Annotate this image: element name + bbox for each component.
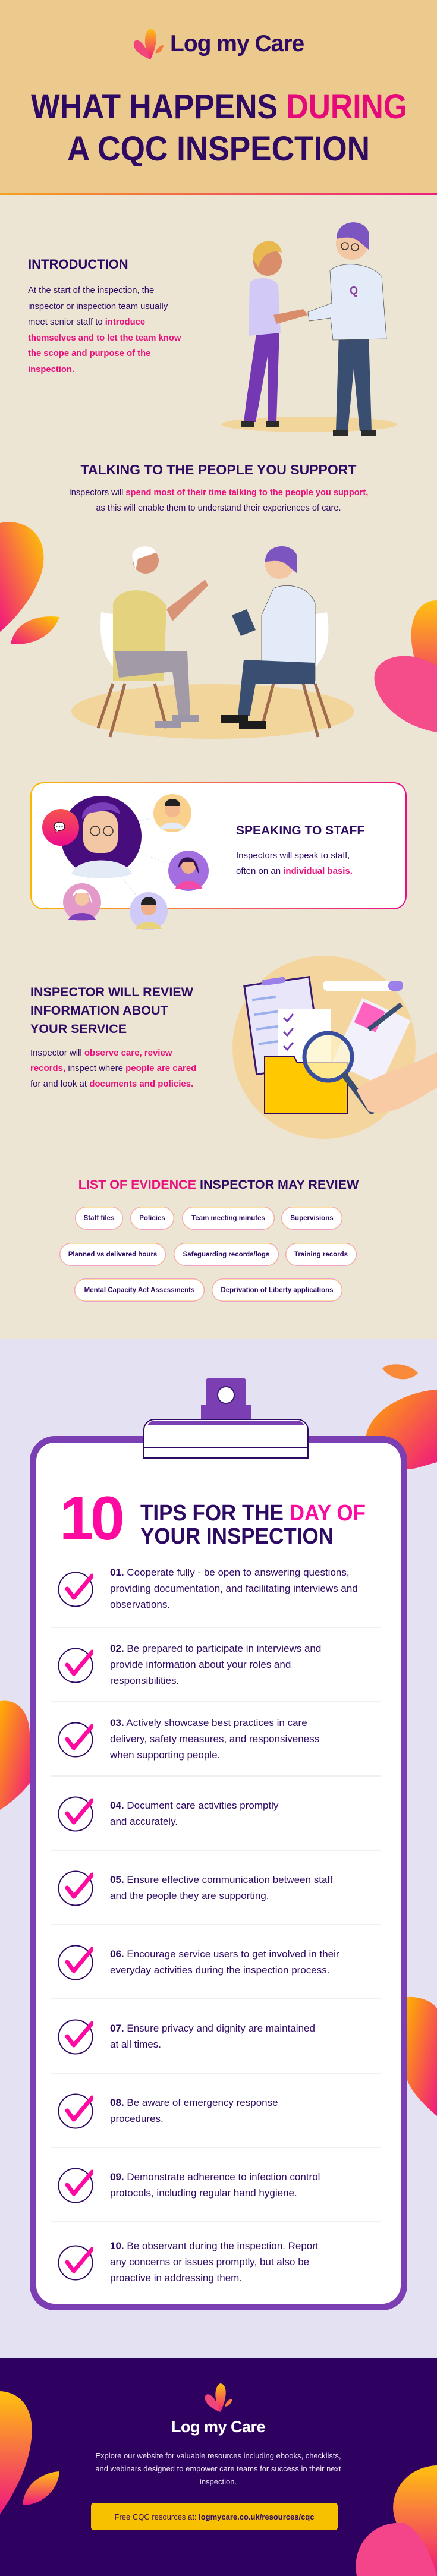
- logo header: [133, 29, 304, 59]
- speaking body text: Inspectors will speak to staff,: [236, 851, 350, 861]
- pill: deprivation of liberty: Deprivation of Liberty applications: [221, 1286, 334, 1293]
- illustration: staff avatars: 💬: [54, 821, 65, 833]
- pill: mental capacity: Mental Capacity Act Assessments: [84, 1286, 194, 1293]
- pill: planned vs delivered hours: [59, 1243, 166, 1266]
- heading: inspector review: [30, 985, 193, 1036]
- pill: team meeting minutes: [182, 1207, 275, 1230]
- panel: tips clipboard: [30, 1436, 407, 2310]
- icon: logo petals: [133, 29, 164, 59]
- footer logo: [171, 2383, 265, 2436]
- decorative blob left: [0, 522, 59, 644]
- tip 09: [58, 2168, 320, 2203]
- decorative blobs footer: [0, 2391, 437, 2576]
- icon: clipboard clip: [143, 1378, 309, 1459]
- tip 08: [58, 2093, 278, 2129]
- tips title: TIPS FOR THE DAY OF: [140, 1501, 366, 1526]
- tip 07: at all times.: [110, 2039, 161, 2049]
- tips section background: [0, 1339, 437, 2358]
- footer body text: Explore our website for valuable resources including ebooks, checklists, and webinars designed to empower care teams for success in their next inspection.: [95, 2451, 341, 2486]
- icon: footer logo: [205, 2383, 232, 2412]
- pill: deprivation of liberty: [212, 1278, 342, 1302]
- pill: training records: [285, 1243, 357, 1266]
- pill: staff files: Staff files: [84, 1215, 114, 1222]
- tip 01: 01. Cooperate fully - be open to answering questions, providing documentation, and facilitating interviews and observations.: [110, 1567, 358, 1610]
- tip 08: procedures.: [110, 2112, 164, 2124]
- tip 02: responsibilities.: [110, 1675, 179, 1686]
- tip 04: and accurately.: [110, 1815, 178, 1827]
- tip 06: [58, 1945, 339, 1980]
- pill: safeguarding: [174, 1243, 279, 1266]
- tip 08: 08. Be aware of emergency response: [110, 2097, 278, 2108]
- pill: team meeting minutes: Team meeting minutes: [191, 1215, 265, 1222]
- tip 05: [58, 1871, 333, 1906]
- illustration: handshake: [221, 222, 397, 436]
- logo text: Log my Care: [170, 31, 304, 56]
- tip 07: 07. Ensure privacy and dignity are maintained: [110, 2022, 315, 2034]
- tips title: [140, 1501, 366, 1549]
- pill: policies: Policies: [139, 1215, 165, 1222]
- tip 10: 10. Be observant during the inspection. Report: [110, 2240, 319, 2251]
- evidence pills: [59, 1207, 357, 1302]
- tip 02: provide information about your roles and: [110, 1659, 291, 1670]
- tip 03: 03. Actively showcase best practices in care: [110, 1717, 307, 1728]
- footer button: Free CQC resources at:: [114, 2512, 196, 2521]
- tip 06: 06. Encourage service users to get involved in their: [110, 1948, 339, 1959]
- tip 10: proactive in addressing them.: [110, 2272, 242, 2284]
- heading: list of evidence: LIST OF EVIDENCE INSPECTOR MAY REVIEW: [78, 1177, 359, 1192]
- review body: Inspector will observe care, review records, inspect where people are cared for and look at documents and policies.: [30, 1048, 196, 1089]
- footer background: [0, 2358, 437, 2576]
- big number 10: 10: [59, 1484, 121, 1553]
- tip 03: [58, 1717, 319, 1761]
- illustration: conversation seated: [71, 546, 354, 739]
- talking body text: [69, 488, 368, 513]
- illustration: staff avatars: [42, 794, 209, 930]
- heading: talking to the people you support: TALKING TO THE PEOPLE YOU SUPPORT: [81, 462, 356, 477]
- tip 03: delivery, safety measures, and responsiveness: [110, 1733, 319, 1744]
- heading: inspector review: INFORMATION ABOUT: [30, 1003, 168, 1018]
- title: WHAT HAPPENS DURING: [31, 87, 407, 126]
- pill: safeguarding: Safeguarding records/logs: [183, 1251, 269, 1258]
- heading: 10 tips: [59, 1484, 366, 1553]
- tip 04: [58, 1796, 278, 1832]
- pill: policies: [130, 1207, 174, 1230]
- heading: introduction: INTRODUCTION: [28, 257, 128, 272]
- pill: staff files: [75, 1207, 123, 1230]
- heading: speaking to staff: SPEAKING TO STAFF: [236, 824, 364, 837]
- tip 05: and the people they are supporting.: [110, 1890, 269, 1901]
- pill: training records: Training records: [294, 1251, 348, 1258]
- panel: inspector review text: [30, 985, 196, 1089]
- pill: supervisions: Supervisions: [290, 1215, 334, 1222]
- tip 10: any concerns or issues promptly, but also be: [110, 2256, 309, 2268]
- tip 07: [58, 2020, 315, 2054]
- header background: [0, 0, 437, 194]
- speaking body text: [236, 851, 353, 876]
- tips title: YOUR INSPECTION: [140, 1524, 334, 1549]
- decorative blob right: [375, 600, 437, 732]
- pill: supervisions: [281, 1207, 342, 1230]
- speaking body text: often on an individual basis.: [236, 865, 353, 876]
- tip 06: everyday activities during the inspection process.: [110, 1964, 329, 1976]
- tip 05: 05. Ensure effective communication between staff: [110, 1873, 333, 1885]
- panel: introduction text: [28, 257, 181, 374]
- illustration: documents and magnifier: [232, 956, 437, 1139]
- intro body: At the start of the inspection, the inspector or inspection team usually meet senior staff to introduce themselves and to let the team know the scope and purpose of the inspection.: [28, 286, 181, 374]
- title: [31, 87, 407, 166]
- tip 02: 02. Be prepared to participate in interviews and: [110, 1643, 321, 1654]
- heading: inspector review: YOUR SERVICE: [30, 1022, 127, 1036]
- pill: planned vs delivered hours: Planned vs delivered hours: [68, 1251, 157, 1258]
- tip 04: 04. Document care activities promptly: [110, 1800, 278, 1810]
- illustration: handshake: Q: [350, 285, 358, 297]
- footer button: logmycare.co.uk/resources/cqc: [199, 2512, 314, 2521]
- decorative blobs tips: [0, 1364, 437, 2116]
- footer button: [91, 2503, 338, 2530]
- header gradient line: [0, 193, 437, 195]
- tip 09: protocols, including regular hand hygiene.: [110, 2187, 297, 2198]
- tip 02: [58, 1643, 321, 1686]
- tip 10: [58, 2240, 319, 2284]
- talking body text: Inspectors will spend most of their time talking to the people you support,: [69, 488, 368, 497]
- talking body text: as this will enable them to understand their experiences of care.: [96, 503, 341, 513]
- heading: inspector review: INSPECTOR WILL REVIEW: [30, 985, 193, 999]
- pill: mental capacity: [74, 1278, 205, 1302]
- panel: speaking to staff: [30, 782, 407, 909]
- tip 03: when supporting people.: [110, 1749, 220, 1761]
- footer logo text: Log my Care: [171, 2418, 265, 2436]
- tip 09: 09. Demonstrate adherence to infection control: [110, 2171, 320, 2183]
